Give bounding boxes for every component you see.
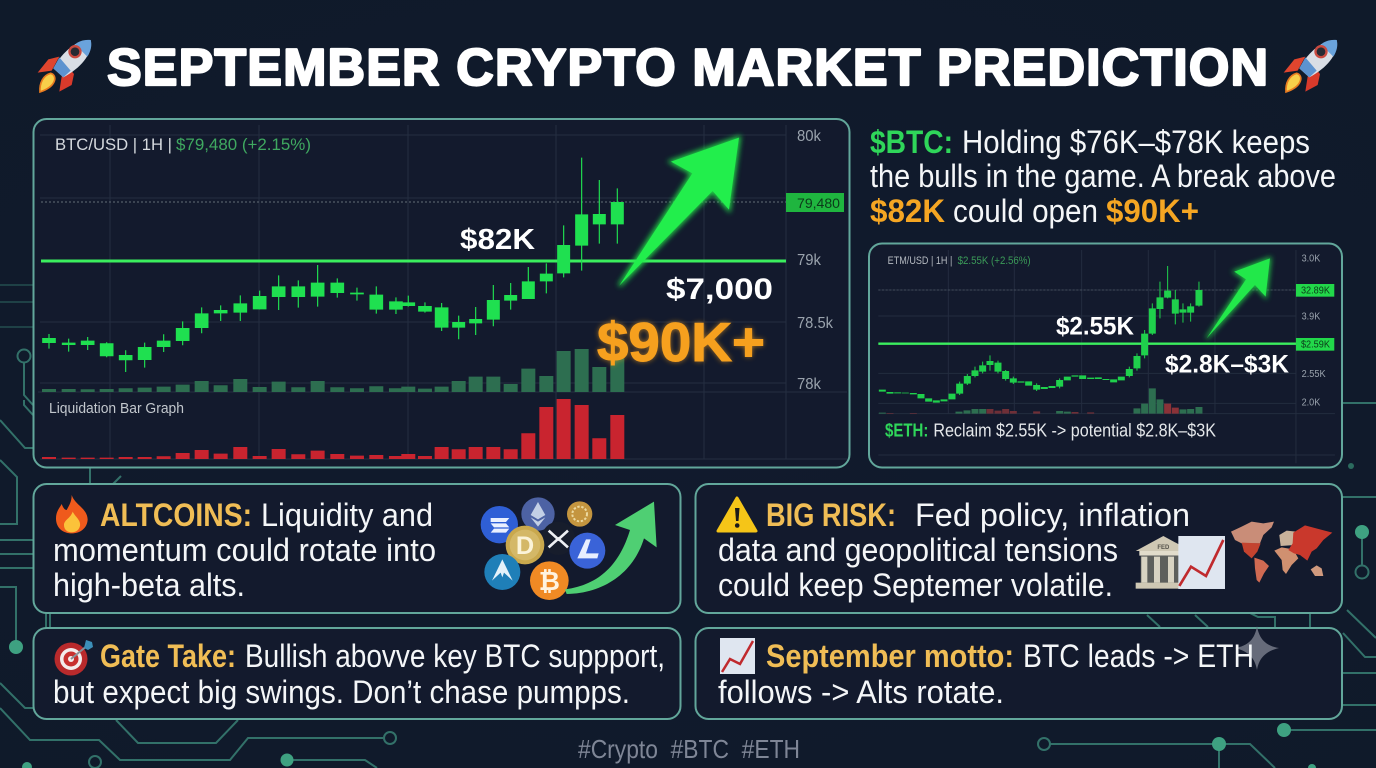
ETH caption: Reclaim $2.55K -> potential $2.8K–$3K bbox=[933, 420, 1217, 441]
text block: BTC analysis: $90K+ bbox=[1106, 193, 1199, 229]
label: $2.8K–$3K: $2.8K–$3K bbox=[1165, 350, 1289, 378]
label: $2.55K: $2.55K bbox=[1056, 312, 1134, 340]
label: $82K: $82K bbox=[460, 224, 535, 256]
panel: ETH chart bbox=[869, 244, 1342, 468]
icon: world map bbox=[1231, 522, 1332, 583]
altcoins text: ALTCOINS: bbox=[100, 497, 252, 533]
icon: coin cluster with arrow bbox=[481, 497, 657, 600]
ETH axis: 32.89K bbox=[1301, 285, 1330, 296]
altcoins text: Liquidity and bbox=[261, 497, 433, 533]
altcoins text: high-beta alts. bbox=[53, 567, 245, 603]
altcoins text: momentum could rotate into bbox=[53, 532, 436, 568]
ETH header: ETM/USD | 1H | bbox=[888, 255, 952, 267]
ETH axis: 2.55K bbox=[1302, 369, 1326, 380]
panel: gate take bbox=[34, 628, 680, 719]
label: $7,000: $7,000 bbox=[666, 273, 773, 306]
icon: fed bank and rising chart bbox=[1136, 536, 1225, 589]
altcoins text bbox=[53, 497, 436, 603]
ETH axis: 3.0K bbox=[1302, 253, 1321, 264]
gate take text bbox=[53, 638, 665, 710]
ETH green line bbox=[878, 334, 1296, 354]
text block: BTC analysis: $82K bbox=[870, 193, 945, 229]
circuit board background bbox=[0, 285, 1376, 768]
panel: BTC chart bbox=[34, 119, 850, 468]
liquidation bars bbox=[49, 399, 617, 459]
label: $90K+: $90K+ bbox=[597, 311, 765, 373]
gate take text: Gate Take: bbox=[100, 638, 236, 674]
motto text: September motto: bbox=[766, 638, 1014, 674]
icon: coin cluster with arrow: D bbox=[516, 532, 534, 560]
price axis bbox=[786, 128, 844, 393]
text block: BTC analysis: Holding $76K–$78K keeps bbox=[962, 124, 1310, 160]
big risk text bbox=[718, 497, 1190, 603]
chart header bbox=[55, 135, 311, 154]
price axis: 80k bbox=[797, 128, 822, 145]
text block: BTC analysis: the bulls in the game. A break above bbox=[870, 158, 1336, 194]
big risk text: BIG RISK: bbox=[766, 497, 896, 533]
panel: altcoins bbox=[34, 484, 680, 613]
motto text: follows -> Alts rotate. bbox=[718, 674, 1004, 710]
arrow: up green bbox=[619, 138, 739, 286]
ETH header: $2.55K (+2.56%) bbox=[958, 255, 1031, 267]
text block: BTC analysis: $BTC: bbox=[870, 124, 953, 160]
icon: rocket left bbox=[38, 40, 91, 92]
chart header: BTC/USD | 1H | bbox=[55, 135, 172, 154]
price axis: 78k bbox=[797, 376, 822, 393]
icon: target bbox=[54, 640, 93, 676]
title: SEPTEMBER CRYPTO MARKET PREDICTION bbox=[107, 39, 1268, 97]
text block: BTC analysis bbox=[870, 124, 1336, 229]
icon: rocket right bbox=[1284, 40, 1337, 92]
liquidation label: Liquidation Bar Graph bbox=[49, 400, 184, 417]
price axis: 78.5k bbox=[797, 315, 834, 332]
chart header: $79,480 (+2.15%) bbox=[176, 135, 311, 154]
panel: big risk bbox=[696, 484, 1342, 613]
ETH volume bbox=[882, 388, 1199, 414]
panel: september motto bbox=[696, 626, 1342, 719]
ETH axis bbox=[1296, 253, 1334, 409]
motto text: BTC leads -> ETH bbox=[1023, 638, 1254, 674]
gate take text: Bullish abovve key BTC suppport, bbox=[245, 638, 665, 674]
ETH arrow bbox=[1207, 258, 1270, 338]
hashtags: #Crypto #BTC #ETH bbox=[578, 734, 800, 764]
ETH axis: $2.59K bbox=[1301, 339, 1330, 350]
ETH axis: 3.9K bbox=[1302, 311, 1321, 322]
ETH axis: 2.0K bbox=[1302, 398, 1321, 409]
price axis: 79k bbox=[797, 252, 822, 269]
green resistance line bbox=[41, 255, 786, 267]
candlesticks bbox=[49, 158, 617, 372]
ETH caption: $ETH: bbox=[885, 420, 928, 441]
ETH candles bbox=[882, 266, 1199, 403]
icon: sparkle bbox=[1235, 626, 1279, 670]
icon: warning bbox=[718, 498, 756, 531]
volume bars bbox=[49, 349, 617, 392]
big risk text: data and geopolitical tensions bbox=[718, 532, 1118, 568]
motto text bbox=[718, 638, 1254, 710]
icon: coin cluster with arrow: ₿ bbox=[539, 566, 560, 596]
text block: BTC analysis: could open bbox=[953, 193, 1098, 229]
icon: rising chart bbox=[720, 638, 755, 674]
gate take text: but expect big swings. Don’t chase pumpps. bbox=[53, 674, 630, 710]
icon: fire bbox=[56, 495, 88, 533]
label: $90K+: $90K+ bbox=[597, 311, 765, 373]
price axis: 79,480 bbox=[797, 195, 840, 211]
ETH header bbox=[888, 255, 1031, 267]
icon: fed bank and rising chart: FED bbox=[1157, 545, 1170, 551]
big risk text: could keep Septemer volatile. bbox=[718, 567, 1113, 603]
big risk text: Fed policy, inflation bbox=[915, 497, 1190, 533]
